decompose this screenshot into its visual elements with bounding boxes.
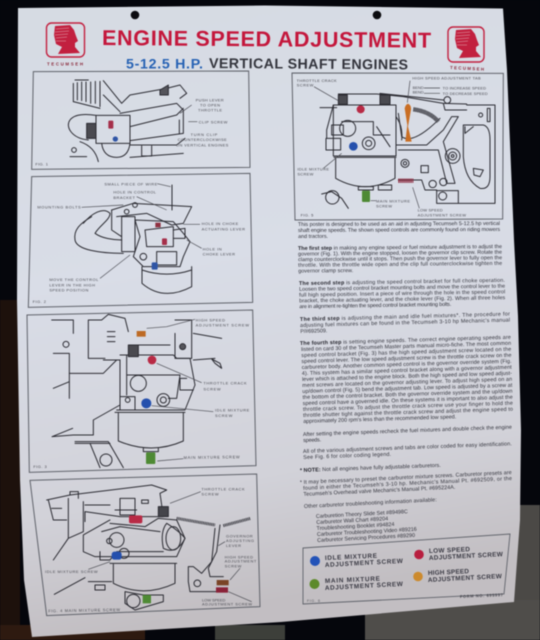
text: preset footnote: found in either the Tecumseh's 3-10 hp. Mechanic's Manual Pt. #692509, or the — [303, 476, 512, 492]
text: publication list: Carburetion Theory Slide Set #89498C — [316, 509, 408, 520]
legend: low speed: ADJUSTMENT SCREW — [429, 551, 504, 562]
text: first step: governor (Fig. 1). With the engine stopped, loosen the governor clip screw. Rotate the — [298, 250, 502, 258]
fig 1 labels: ON VERTICAL ENGINES — [176, 142, 229, 147]
fig 4 labels: SCREW — [201, 492, 219, 497]
fig 3 labels: HIGH SPEED — [196, 318, 225, 323]
fig 2 labels: CHOKE LEVER — [203, 251, 235, 256]
text: publication list: Carburetor Wall Chart #89204 — [316, 516, 388, 526]
text: second step: The second step is adjusting the speed control bracket for full choke operation. — [299, 278, 505, 287]
text: second step: Loosen the two speed control bracket mounting bolts and move the control lever to the — [299, 284, 505, 293]
text: color coding paragraph: See Fig. 6 for color coding legend. — [303, 452, 391, 461]
fig 2 engine drawing — [75, 185, 192, 293]
fig 2 labels: ACTUATING LEVER — [202, 226, 245, 231]
legend: form number: FORM NO. 695997 — [460, 592, 504, 599]
text: color coding paragraph: All of the various adjustment screws and tabs are color coded for easy identification. — [303, 441, 512, 455]
fig 2 labels: MOVE THE CONTROL — [49, 277, 99, 282]
fig 3 labels: MAIN MIXTURE SCREW — [184, 454, 240, 460]
fig 5 labels: IDLE MIXTURE — [297, 167, 329, 172]
fig 1 labels: TURN CLIP — [191, 132, 218, 137]
text: second step: bracket, the choke actuating lever, and the choke lever (Fig. 2). When all three holes — [299, 295, 506, 304]
text: fourth step: carburetor body. Another common speed control is the governor override system (Fig. — [302, 359, 512, 371]
text: third step: P/#692509. — [300, 328, 327, 335]
fig 1 labels: TO OPEN — [200, 102, 220, 107]
legend: idle mixture: ADJUSTMENT SCREW — [325, 558, 404, 569]
text: fourth step: the bottom of the control bracket. Both the governor override system and the up/down — [302, 389, 513, 401]
fig 2 labels: MOUNTING BOLTS — [37, 205, 81, 210]
text: fourth step: speed control lever. The low speed adjustment screw is the throttle crack screw on the — [301, 353, 512, 365]
fig 2 labels — [33, 181, 245, 304]
fig 3 labels — [33, 318, 250, 469]
text: second step — [299, 278, 506, 310]
fig 5 labels: LOW SPEED — [418, 208, 443, 213]
text: intro paragraph: and tractors. — [298, 234, 328, 240]
fig 4 labels: LOW SPEED — [202, 597, 225, 602]
fig 3 labels: FIG. 3 — [33, 464, 47, 469]
legend: low speed — [414, 546, 504, 562]
fig 5 labels: SCREW — [297, 172, 314, 177]
fig 5 labels: SCREW — [297, 83, 314, 88]
text: preset footnote: * It may be necessary to preset the carburetor mixture screws. Carburetor presets are — [300, 470, 512, 486]
fig 3 labels: THROTTLE CRACK — [203, 381, 247, 386]
text: first step: throttle. With the throttle wide open and the clip full counterclockwise tighten the — [298, 261, 502, 269]
text: other information: Other carburetor troubleshooting information available: — [304, 497, 437, 510]
text: color coding paragraph — [303, 441, 512, 461]
text: second step: are in alignment re-tighten the speed control bracket mounting bolts. — [299, 302, 451, 310]
fig 5 labels: FIG. 5 — [301, 212, 314, 217]
text: fourth step: ment screws are located on the governor adjusting lever. To adjust high speed on an — [302, 377, 512, 389]
legend: main mixture: MAIN MIXTURE — [325, 576, 381, 585]
text: publication list: Troubleshooting Booklet #94824 — [316, 522, 395, 532]
text: fourth step: 4). This system has a similar speed control bracket along with a governor adjustment — [302, 365, 512, 377]
fig 5 labels: THROTTLE CRACK — [297, 78, 337, 83]
legend: idle mixture: IDLE MIXTURE — [325, 553, 378, 562]
panel: fig 5 speed control — [292, 73, 503, 220]
fig 4 labels: FIG. 4 MAIN MIXTURE SCREW — [48, 607, 120, 613]
text: preset footnote: Tecumseh's Overhead valve Mechanic's Manual Pt. #695224A. — [303, 485, 455, 498]
fig 5 labels: ADJUSTMENT SCREW — [418, 212, 466, 217]
punched hole right — [373, 11, 381, 19]
fig 4 labels: THROTTLE CRACK — [201, 486, 245, 491]
text: fourth step: The fourth step is setting engine speeds. The correct engine operating speeds are — [300, 335, 511, 347]
fig 4 labels: GOVERNOR — [226, 533, 253, 538]
legend: high speed: HIGH SPEED — [428, 568, 469, 577]
fig 5 labels: TO INCREASE SPEED — [443, 86, 486, 91]
panel: fig 3 carburetor front — [27, 310, 256, 472]
text: first step: governor clamp screw. — [298, 268, 353, 275]
punched hole left — [131, 11, 139, 19]
legend: high speed — [413, 568, 503, 584]
fig 4 labels: ADJUSTING — [226, 538, 254, 543]
fig 5 labels — [297, 76, 488, 217]
fig 4 labels: ADJUSTMENT — [225, 558, 257, 563]
text: first step — [298, 244, 502, 275]
logo left — [46, 23, 84, 66]
logo right: TECUMSEH — [450, 65, 484, 72]
fig 1 labels: COUNTERCLOCKWISE — [178, 137, 227, 142]
text: first step: clamp counterclockwise until it stops. Then push the governor lever to fully open the — [298, 255, 502, 263]
text: recheck paragraph: speeds. — [303, 437, 321, 444]
text: fourth step: speed control bracket (Fig. 3) has the high speed adjustment screw located on the — [301, 347, 511, 359]
text: fourth step: lever which is attached to the engine block. Both the high speed and low speed adjust- — [302, 371, 512, 383]
fig 5 labels: BEND — [413, 85, 424, 90]
fig 2 labels: SMALL PIECE OF WIRE — [104, 181, 158, 186]
legend: main mixture: ADJUSTMENT SCREW — [325, 581, 404, 592]
text: intro paragraph: This poster is designed to be used as an aid in adjusting Tecumseh 5-12.5 hp vertical — [298, 221, 500, 228]
text: third step: The third step is adjusting the main and idle fuel mixtures*. The procedure for — [300, 311, 510, 323]
fig 2 labels: LEVER IN THE HIGH — [49, 282, 95, 287]
fig 1 labels — [35, 97, 229, 166]
text: third step — [300, 311, 510, 335]
title: ENGINE SPEED ADJUSTMENT — [102, 26, 431, 53]
fig 3 engine drawing — [52, 314, 222, 468]
fig 2 labels: SPEED POSITION — [49, 288, 88, 293]
panel: fig 1 governor — [32, 71, 250, 169]
fig 1 labels: PUSH LEVER — [196, 97, 224, 102]
fig 4 labels: LEVER — [226, 543, 241, 548]
logo right — [448, 27, 484, 72]
fig 3 labels: IDLE MIXTURE — [215, 407, 250, 412]
text: first step: The first step in making any engine speed or fuel mixture adjustment is to adjust the — [298, 244, 502, 252]
fig 1 labels: CLIP SCREW — [199, 119, 228, 124]
fig 4 labels — [45, 486, 257, 613]
fig 2 labels: HOLE IN CONTROL — [113, 190, 157, 195]
fig 2 labels: HOLE IN CHOKE — [202, 221, 239, 226]
legend: low speed: LOW SPEED — [429, 546, 470, 555]
fig 5 labels: HIGH SPEED ADJUSTMENT TAB — [412, 76, 481, 81]
legend: high speed: ADJUSTMENT SCREW — [428, 573, 503, 584]
text: publication list: Carburetor Servicing Procedures #89290 — [317, 533, 415, 544]
fig 2 labels: FIG. 2 — [33, 299, 47, 304]
fig 3 labels: SCREW — [203, 386, 221, 391]
fig 1 engine drawing — [68, 80, 187, 162]
panel: fig 4 governor override — [30, 474, 260, 616]
text: fourth step: approximately 200 rpm's less than the recommended low speed. — [303, 414, 456, 425]
fig 4 engine drawing — [47, 485, 227, 610]
text: note: * NOTE: Not all engines have fully adjustable carburetors. — [300, 463, 441, 474]
text: fourth step: up/down control (Fig. 5) bend the adjustment tab. Low speed is adjusted by a screw at — [302, 383, 513, 395]
subtitle: 5-12.5 H.P. — [126, 56, 203, 72]
fig 1 labels: THROTTLE — [198, 107, 222, 112]
fig 5 labels: TO DECREASE SPEED — [443, 91, 488, 96]
legend: main mixture — [310, 576, 404, 592]
fig 2 labels: HOLE IN — [203, 246, 222, 251]
fig 5 labels: BEND — [413, 90, 424, 95]
text: recheck paragraph — [303, 425, 512, 444]
text: preset footnote — [300, 470, 512, 498]
text: fourth step: throttle crack screw. To adjust the throttle crack screw use your finger to hold the — [303, 401, 513, 413]
text: recheck paragraph: After setting the engine speeds recheck the fuel mixtures and double check the engine — [303, 425, 512, 438]
text: intro paragraph: shaft engine speeds. The shown speed controls are commonly found on riding mowers — [298, 227, 500, 234]
legend: figure number: FIG. 6 — [307, 599, 320, 603]
fig 4 labels: SCREW — [225, 564, 242, 569]
fig 1 labels: FIG. 1 — [35, 161, 49, 166]
fig 4 labels: IDLE MIXTURE SCREW — [45, 569, 98, 574]
fig 3 labels: ADJUSTMENT SCREW — [196, 322, 249, 327]
fig 5 engine drawing — [320, 93, 495, 208]
fig 2 labels: BRACKET — [113, 195, 136, 200]
logo left: TECUMSEH — [47, 62, 83, 66]
text: fourth step: throttle shutter tight against the throttle crack screw and adjust the engine speed to — [303, 407, 513, 419]
text: publication list — [316, 509, 417, 544]
text: fourth step: listed on card 30 of the Tecumseh Master parts manual micro-fiche. The most common — [301, 341, 511, 353]
subtitle: VERTICAL SHAFT ENGINES — [209, 56, 408, 73]
panel: fig 6 color legend — [303, 534, 510, 604]
fig 5 labels: MAIN MIXTURE — [376, 198, 410, 203]
fig 3 labels: SCREW — [215, 413, 233, 418]
text: second step: full high speed position. Insert a piece of wire through the hole in the speed control — [299, 289, 505, 299]
text: fourth step: speed control have a governed idle. On these systems it is important to also adjust the — [303, 395, 513, 407]
fig 5 labels: SCREW — [376, 203, 392, 208]
fig 4 labels: HIGH SPEED — [225, 554, 253, 559]
text: intro paragraph — [298, 221, 500, 240]
text: publication list: Carburetor Troubleshooting Video #89216 — [317, 527, 417, 538]
text: third step: adjusting fuel mixtures can be found in the Tecumseh 3-10 hp Mechanic's manual — [300, 318, 510, 329]
text: fourth step — [300, 335, 514, 425]
panel: fig 2 choke alignment — [28, 173, 253, 307]
fig 4 labels: ADJUSTMENT SCREW — [202, 602, 252, 607]
legend: idle mixture — [310, 553, 404, 569]
